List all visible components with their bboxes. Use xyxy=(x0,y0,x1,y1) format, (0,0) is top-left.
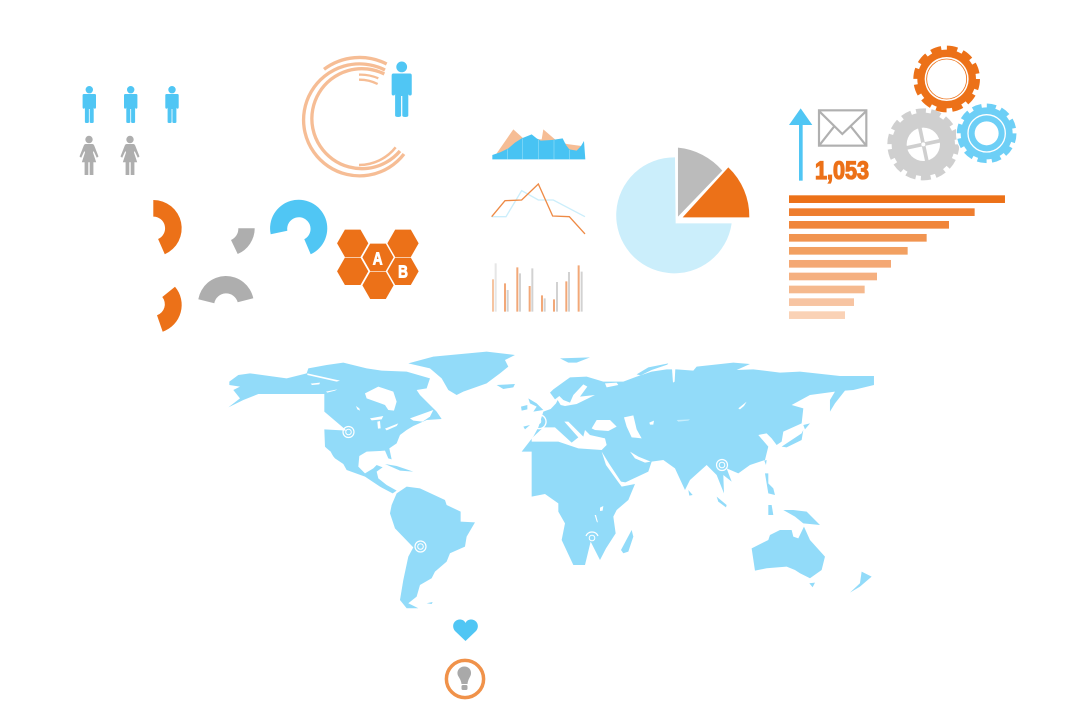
icon: light bulb in circle xyxy=(446,660,484,698)
donut: gray top xyxy=(231,228,255,254)
map marker: Africa xyxy=(586,532,598,541)
donut: orange top xyxy=(153,200,182,254)
map marker: Asia xyxy=(716,460,728,470)
map: Americas and Greenland xyxy=(228,352,515,608)
icon: man 2 xyxy=(124,86,137,123)
icon: woman 1 xyxy=(80,136,98,175)
icon: woman 2 xyxy=(120,136,140,175)
donut: gray bottom xyxy=(198,276,253,303)
arcs xyxy=(304,57,404,176)
icon: blue gear xyxy=(959,106,1014,161)
pie slice: gray xyxy=(678,148,722,217)
icon: up arrow xyxy=(789,108,812,181)
donut: blue xyxy=(270,200,327,254)
gears xyxy=(891,49,1014,177)
icon: man 3 xyxy=(165,86,179,123)
map: Europe, Asia, Africa, Oceania xyxy=(521,357,874,593)
column chart xyxy=(493,263,582,312)
people pictogram: three men and two women xyxy=(80,86,179,175)
world map xyxy=(228,352,874,608)
icon: heart xyxy=(453,619,478,641)
label B: B xyxy=(398,263,408,282)
map marker: Europe xyxy=(534,415,546,429)
map marker: South America xyxy=(415,541,426,552)
number: 1,053: 1,053 xyxy=(815,157,869,185)
icon: man 1 xyxy=(83,86,96,123)
pie chart xyxy=(616,148,749,273)
area chart xyxy=(492,129,585,159)
pie slice: orange xyxy=(683,167,749,217)
hexagon cluster with A and B xyxy=(337,229,419,299)
map marker: North America xyxy=(343,426,354,438)
icon: envelope xyxy=(819,110,866,146)
pie slice: light blue xyxy=(616,157,732,273)
line chart xyxy=(492,184,585,234)
concentric arc gauge with person xyxy=(304,57,412,176)
icon: orange gear xyxy=(916,49,977,109)
horizontal bar chart xyxy=(789,195,1005,319)
donut segments xyxy=(153,200,327,332)
icon: gray gear xyxy=(891,112,956,177)
icon: large man xyxy=(392,62,412,117)
label A: A xyxy=(373,250,383,269)
donut: orange bottom xyxy=(157,287,182,332)
